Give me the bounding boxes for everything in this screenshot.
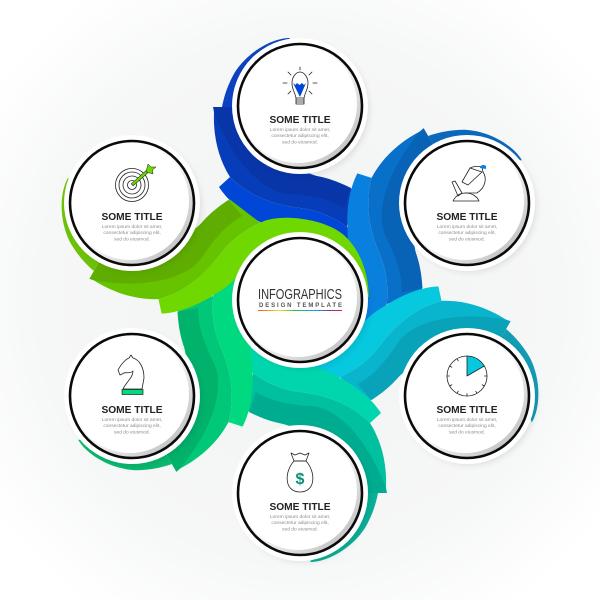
body text: sed do eiusmod. [449,236,485,242]
rainbow underline [258,310,342,311]
arm: upper left, lime swoosh [30,101,390,404]
icon: target with dart [116,164,156,202]
body text: sed do eiusmod. [114,429,150,435]
body text: consectetur adipiscing elit, [271,133,329,139]
body text: sed do eiusmod. [449,429,485,435]
centre subheading: DESIGN TEMPLATE [259,303,342,309]
node: top, idea [232,38,368,174]
icon: light bulb [283,67,317,104]
arm: lower right, cyan swoosh [210,196,570,499]
body text: Lorem ipsum dolor sit amet, [437,418,497,423]
title: SOME TITLE [436,212,498,223]
arm: upper right, blue swoosh [206,94,566,397]
node: lower left, chess knight [64,328,200,464]
body text: Lorem ipsum dolor sit amet, [102,418,162,423]
arm: bottom, teal swoosh [221,242,387,562]
title: SOME TITLE [101,212,163,223]
title: SOME TITLE [269,115,331,126]
title: SOME TITLE [436,405,498,416]
node: upper left, target [64,135,200,271]
arm: lower left, green swoosh [34,203,394,506]
body text: sed do eiusmod. [114,236,150,242]
node: bottom, money [232,425,368,561]
body text: consectetur adipiscing elit, [438,230,496,236]
icon: money bag: $ [296,471,305,488]
body text: consectetur adipiscing elit, [271,520,329,526]
body text: Lorem ipsum dolor sit amet, [437,225,497,230]
centre heading: INFOGRAPHICS [258,286,342,303]
body text: Lorem ipsum dolor sit amet, [102,225,162,230]
node: lower right, clock [399,328,535,464]
node: upper right, microscope [399,135,535,271]
icon: chess knight [118,355,144,394]
body text: sed do eiusmod. [282,139,318,145]
arm: top, dark blue swoosh [213,38,379,358]
body text: consectetur adipiscing elit, [103,423,161,429]
body text: consectetur adipiscing elit, [438,423,496,429]
icon: microscope [452,165,486,201]
body text: consectetur adipiscing elit, [103,230,161,236]
centre circle [232,232,368,368]
body text: sed do eiusmod. [282,526,318,532]
body text: Lorem ipsum dolor sit amet, [270,128,330,133]
icon: clock [447,356,487,396]
title: SOME TITLE [101,405,163,416]
body text: Lorem ipsum dolor sit amet, [270,515,330,520]
title: SOME TITLE [269,502,331,513]
